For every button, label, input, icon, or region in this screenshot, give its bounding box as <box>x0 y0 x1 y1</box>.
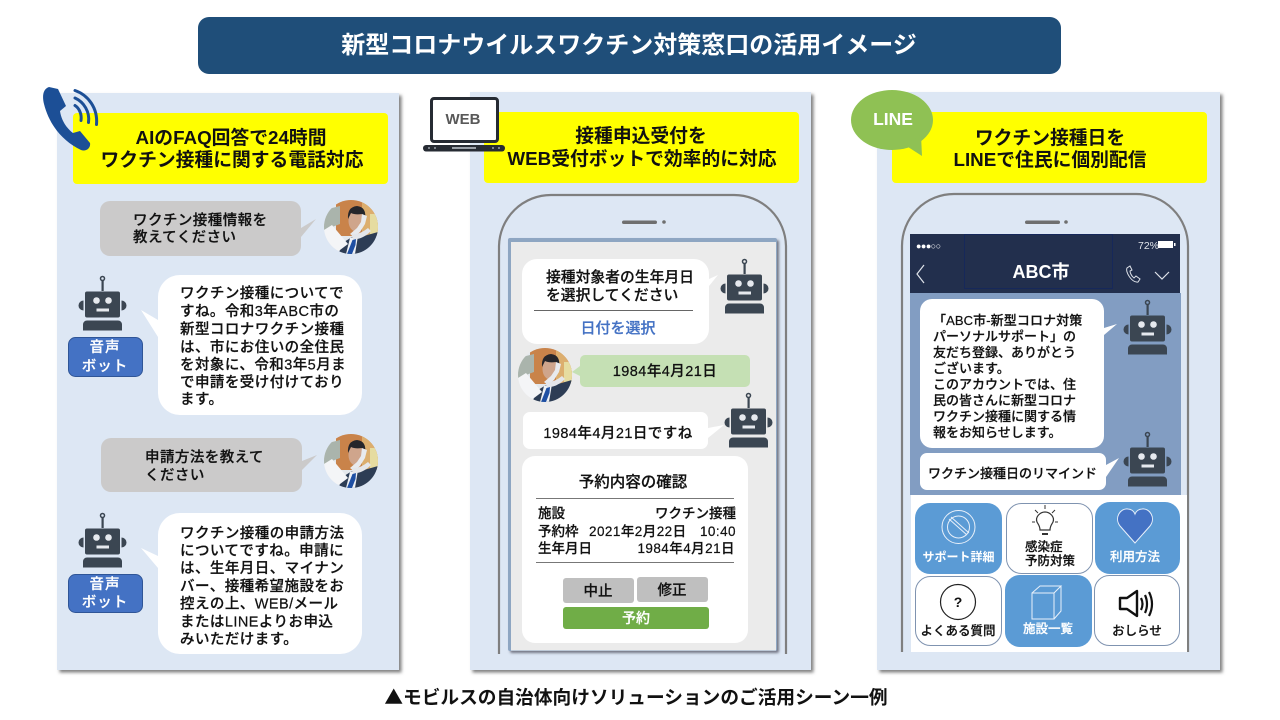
bot reply bubble 2: バー、接種希望施設をお <box>180 578 344 595</box>
bot reply bubble 2 <box>141 513 362 654</box>
bot confirm bubble <box>523 412 724 449</box>
menu: notices: おしらせ <box>1112 624 1162 638</box>
bot confirm bubble: 1984年4月21日ですね <box>543 425 693 442</box>
chat screen <box>508 238 777 651</box>
button: reserve: 予約 <box>622 610 650 626</box>
icon: robot <box>1124 432 1172 486</box>
heading: web <box>484 112 799 183</box>
menu: notices <box>1094 576 1180 646</box>
button: cancel <box>563 578 634 603</box>
menu: support details: サポート詳細 <box>922 549 995 564</box>
bot question bubble: 接種対象者の生年月日 <box>546 268 694 286</box>
welcome bubble: ワクチン接種に関する情 <box>933 409 1076 424</box>
heading: web: 接種申込受付を <box>575 124 707 146</box>
reservation card: 予約枠 <box>538 524 579 539</box>
menu: support details <box>915 503 1002 574</box>
voice bot badge 1 <box>68 338 142 376</box>
icon: robot <box>724 394 772 448</box>
user bubble 2: ください <box>145 467 205 484</box>
icon: LINE speech bubble <box>851 90 933 156</box>
user bubble 2: 申請方法を教えて <box>145 449 264 466</box>
menu: infection prevention <box>1006 504 1092 574</box>
bot reply bubble 1: で申請を受け付けており <box>180 373 344 391</box>
bot reply bubble 2: またはLINEよりお申込 <box>180 614 333 630</box>
heading: web: WEB受付ボットで効率的に対応 <box>507 147 777 169</box>
user bubble 1 <box>100 201 316 256</box>
heading: line: LINEで住民に個別配信 <box>953 149 1147 170</box>
bot reply bubble 2: についてですね。申請に <box>180 542 344 560</box>
bot reply bubble 2: ワクチン接種の申請方法 <box>180 525 344 542</box>
welcome bubble: 報をお知らせします。 <box>933 425 1061 440</box>
bot reply bubble 2: 控えの上、WEB/メール <box>180 596 338 612</box>
app header bar <box>910 234 1180 293</box>
button: reserve <box>563 607 709 629</box>
reservation card: 予約内容の確認 <box>579 473 688 491</box>
welcome bubble: ございます。 <box>933 361 1010 376</box>
title banner: 新型コロナウイルスワクチン対策窓口の活用イメージ <box>341 32 917 59</box>
welcome bubble: パーソナルサポート」の <box>933 329 1076 344</box>
voice bot badge 2: 音声 <box>90 575 120 593</box>
icon: robot <box>720 260 768 314</box>
menu: FAQ: よくある質問 <box>920 623 996 638</box>
user bubble 1: 教えてください <box>133 229 236 246</box>
caption: ▲モビルスの自治体向けソリューションのご活用シーン一例 <box>384 683 888 710</box>
heading: phone support <box>73 113 388 184</box>
icon: telephone handset <box>43 87 97 151</box>
reservation card: 2021年2月22日 <box>589 523 687 539</box>
heading: phone support: AIのFAQ回答で24時間 <box>136 126 326 148</box>
bot reply bubble 1: は、市にお住いの全住民 <box>180 338 344 356</box>
button: cancel: 中止 <box>584 583 612 600</box>
button: edit: 修正 <box>658 582 686 599</box>
icon: laptop: WEB <box>446 111 481 128</box>
user answer bubble <box>572 355 750 387</box>
heading: phone support: ワクチン接種に関する電話対応 <box>101 149 364 170</box>
heading: line <box>892 112 1207 183</box>
app header bar: ABC市 <box>1012 262 1070 282</box>
reservation card: 10:40 <box>700 524 736 539</box>
bot reply bubble 1: ます。 <box>180 391 223 408</box>
bot reply bubble 1: 新型コロナワクチン接種 <box>180 321 344 338</box>
bot reply bubble 2: は、生年月日、マイナン <box>180 560 344 577</box>
welcome bubble <box>920 299 1117 448</box>
reservation card: 1984年4月21日 <box>637 540 735 556</box>
avatar: caller <box>324 200 378 254</box>
panel: LINE delivery <box>851 90 1220 670</box>
reminder bubble: ワクチン接種日のリマインド <box>928 466 1097 481</box>
chat background <box>910 293 1181 495</box>
phone frame <box>902 194 1188 652</box>
user answer bubble: 1984年4月21日 <box>613 363 717 380</box>
bot question bubble <box>522 259 718 344</box>
welcome bubble: このアカウントでは、住 <box>933 377 1076 392</box>
avatar: user <box>518 348 572 402</box>
heading: line: ワクチン接種日を <box>975 127 1125 148</box>
phone frame <box>499 195 786 654</box>
rich menu <box>911 495 1187 652</box>
bot reply bubble 1: を対象に、令和3年5月ま <box>180 356 346 374</box>
welcome bubble: 民の皆さんに新型コロナ <box>933 393 1076 408</box>
button: edit <box>637 577 708 602</box>
icon: robot <box>1124 300 1172 354</box>
menu: how to use: 利用方法 <box>1110 549 1160 564</box>
reservation card: 生年月日 <box>538 540 592 556</box>
avatar: caller <box>324 434 378 488</box>
icon: robot <box>78 514 126 568</box>
bot reply bubble 1: ワクチン接種についてで <box>180 285 344 302</box>
voice bot badge 1: ボット <box>82 358 128 375</box>
icon: laptop <box>423 98 505 152</box>
title banner <box>198 17 1061 74</box>
bot question bubble: 日付を選択 <box>580 320 656 337</box>
menu: infection prevention: 感染症 <box>1025 539 1063 554</box>
bot reply bubble 1 <box>141 275 362 415</box>
bot reply bubble 2: みいただけます。 <box>180 631 298 648</box>
voice bot badge 2: ボット <box>82 594 128 611</box>
user bubble 1: ワクチン接種情報を <box>133 212 268 229</box>
reservation card <box>522 456 748 643</box>
menu: how to use <box>1095 502 1180 574</box>
voice bot badge 2 <box>68 574 142 612</box>
menu: FAQ <box>916 576 1002 646</box>
reminder bubble <box>920 453 1119 490</box>
app header bar: ●●●○○ <box>916 241 941 251</box>
app header bar: 72% <box>1138 240 1159 252</box>
welcome bubble: 「ABC市-新型コロナ対策 <box>933 313 1082 328</box>
panel: phone AI FAQ <box>43 87 399 670</box>
bot question bubble: を選択してください <box>546 287 678 304</box>
voice bot badge 1: 音声 <box>90 338 120 356</box>
reservation card: 施設 <box>538 506 566 521</box>
menu: facilities: 施設一覧 <box>1023 621 1073 636</box>
icon: LINE speech bubble: LINE <box>873 109 913 129</box>
bot reply bubble 1: すね。令和3年ABC市の <box>180 302 339 320</box>
menu: infection prevention: 予防対策 <box>1025 553 1076 568</box>
menu: FAQ: ? <box>954 594 962 610</box>
welcome bubble: 友だち登録、ありがとう <box>933 345 1076 360</box>
user bubble 2 <box>101 438 317 492</box>
menu: facilities <box>1005 575 1092 647</box>
reservation card: ワクチン接種 <box>655 506 736 521</box>
icon: robot <box>78 276 126 330</box>
panel: web reception <box>423 92 811 670</box>
